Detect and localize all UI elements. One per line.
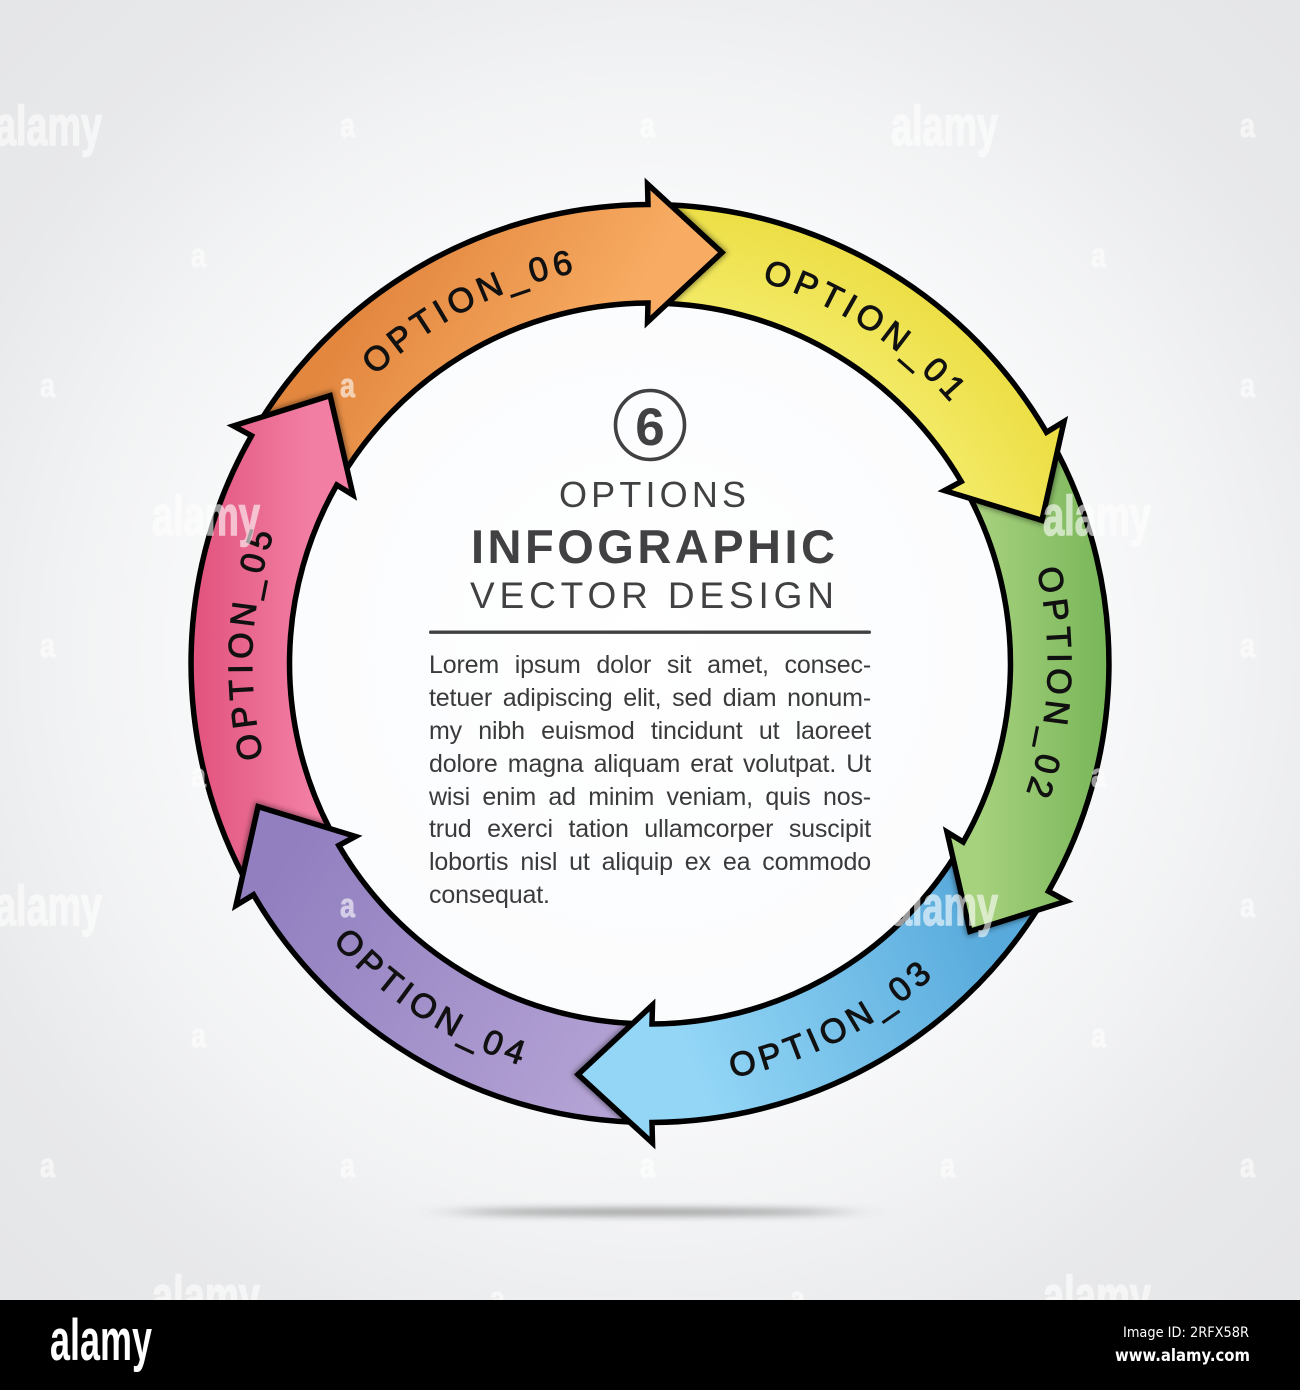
watermarks: a — [640, 107, 656, 145]
arrow: option 06 (orange) — [270, 190, 718, 462]
heading: INFOGRAPHIC: INFOGRAPHIC — [471, 520, 835, 573]
icon: number 6 badge: 6 — [635, 398, 665, 457]
text block: lorem ipsum — [429, 651, 871, 909]
watermarks: a — [1240, 1147, 1256, 1185]
watermarks: a — [191, 757, 207, 795]
watermarks: a — [1091, 757, 1107, 795]
label: OPTION_01: OPTION_01 — [766, 262, 964, 402]
watermarks: a — [40, 1147, 56, 1185]
watermarks: a — [1240, 367, 1256, 405]
arrow: option 02 (green) — [951, 460, 1106, 928]
watermarks: a — [940, 1147, 956, 1185]
watermarks: a — [1240, 887, 1256, 925]
watermarks: a — [340, 367, 356, 405]
watermarks: alamy — [1043, 484, 1151, 547]
text block: lorem ipsum: consequat. — [429, 881, 550, 909]
watermarks: a — [191, 1017, 207, 1055]
icon: number 6 badge — [616, 390, 684, 460]
text block: lorem ipsum: lobortis nisl ut aliquip ex ea commodo — [429, 848, 871, 876]
watermarks: alamy — [891, 874, 998, 937]
text block: lorem ipsum: dolore magna aliquam erat volutpat. Ut — [429, 750, 871, 778]
text block: lorem ipsum: trud exerci tation ullamcorper suscipit — [429, 815, 871, 843]
arrow: option 04 (purple) — [240, 810, 626, 1119]
watermarks: a — [340, 887, 356, 925]
watermarks: a — [1240, 107, 1256, 145]
watermarks: alamy — [152, 484, 260, 547]
heading: OPTIONS: OPTIONS — [559, 474, 746, 515]
watermarks: a — [340, 1147, 356, 1185]
watermarks: a — [340, 107, 356, 145]
text block: lorem ipsum: Lorem ipsum dolor sit amet, consec- — [429, 651, 871, 679]
heading: VECTOR DESIGN: VECTOR DESIGN — [470, 575, 834, 616]
text block: lorem ipsum: tetuer adipiscing elit, sed diam nonum- — [429, 684, 871, 712]
watermarks: a — [1240, 627, 1256, 665]
footer logo: alamy — [50, 1308, 152, 1373]
arrow: option 01 (yellow) — [674, 208, 1060, 517]
arrow outlines — [41, 89, 1259, 1238]
image id: Image ID: 2RFX58R — [1123, 1325, 1249, 1341]
divider line — [429, 630, 871, 634]
website: www.alamy.com — [1115, 1346, 1250, 1366]
arrow: option 03 (blue) — [582, 866, 1030, 1136]
text block: lorem ipsum: wisi enim ad minim veniam, quis nos- — [429, 783, 871, 811]
label: OPTION_05: OPTION_05 — [228, 528, 272, 760]
watermarks: a — [1091, 237, 1107, 275]
watermarks: alamy — [891, 94, 998, 157]
text block: lorem ipsum: my nibh euismod tincidunt ut laoreet — [429, 717, 871, 745]
watermarks: a — [1091, 1017, 1107, 1055]
floor shadow — [450, 1209, 850, 1215]
footer bar — [0, 1300, 1300, 1390]
watermarks: a — [40, 367, 56, 405]
label: OPTION_03: OPTION_03 — [730, 962, 930, 1076]
watermarks: a — [640, 1147, 656, 1185]
label: OPTION_04: OPTION_04 — [337, 930, 524, 1064]
infographic diagram — [188, 178, 1112, 1220]
label: OPTION_06: OPTION_06 — [364, 250, 572, 371]
watermarks: a — [40, 627, 56, 665]
arrow: option 05 (pink) — [194, 399, 349, 868]
watermarks: a — [191, 237, 207, 275]
label: OPTION_02: OPTION_02 — [1026, 568, 1072, 798]
